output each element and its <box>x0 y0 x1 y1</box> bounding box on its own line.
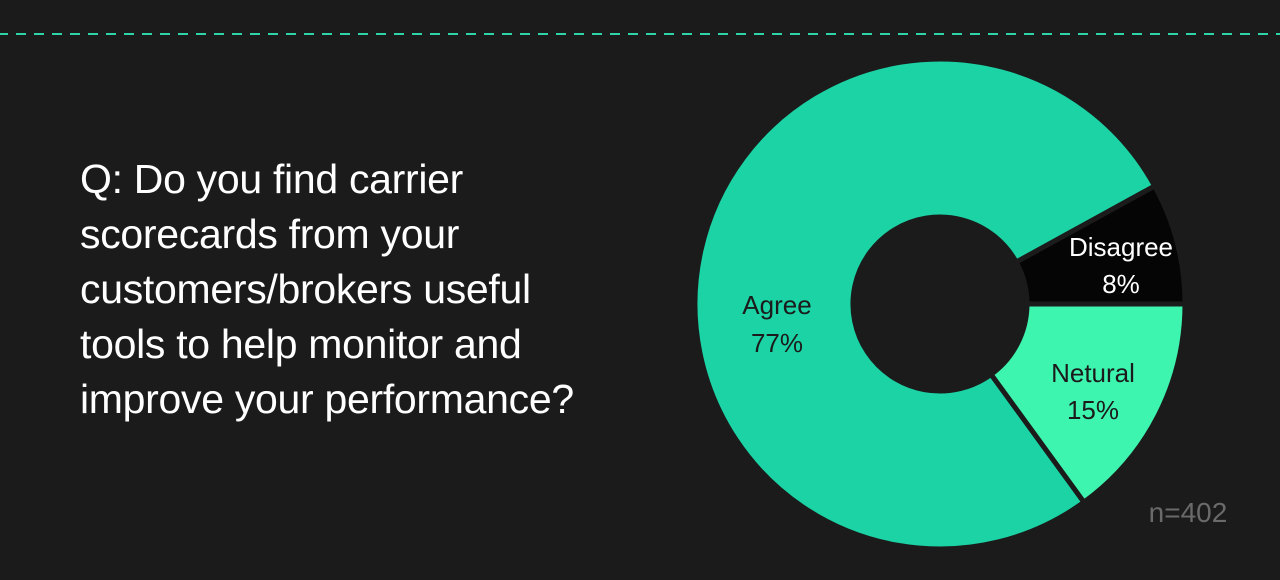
donut chart <box>695 59 1185 549</box>
label: disagree: Disagree <box>1069 232 1173 262</box>
question text: tools to help monitor and <box>80 321 522 367</box>
segment: neutral <box>991 304 1185 502</box>
question text <box>80 156 574 422</box>
question text: scorecards from your <box>80 211 459 257</box>
label: agree: 77% <box>751 328 803 358</box>
segment: disagree <box>1016 186 1185 304</box>
question text: customers/brokers useful <box>80 266 531 312</box>
sample size: n=402 <box>1149 497 1227 528</box>
label: disagree <box>1069 232 1173 299</box>
label: neutral: Netural <box>1051 358 1135 388</box>
label: agree <box>742 290 812 358</box>
segment: agree <box>695 59 1155 549</box>
label: disagree: 8% <box>1102 269 1140 299</box>
question text: Q: Do you find carrier <box>80 156 463 202</box>
label: neutral <box>1051 358 1135 425</box>
label: neutral: 15% <box>1067 395 1119 425</box>
label: agree: Agree <box>742 290 812 320</box>
question text: improve your performance? <box>80 376 574 422</box>
